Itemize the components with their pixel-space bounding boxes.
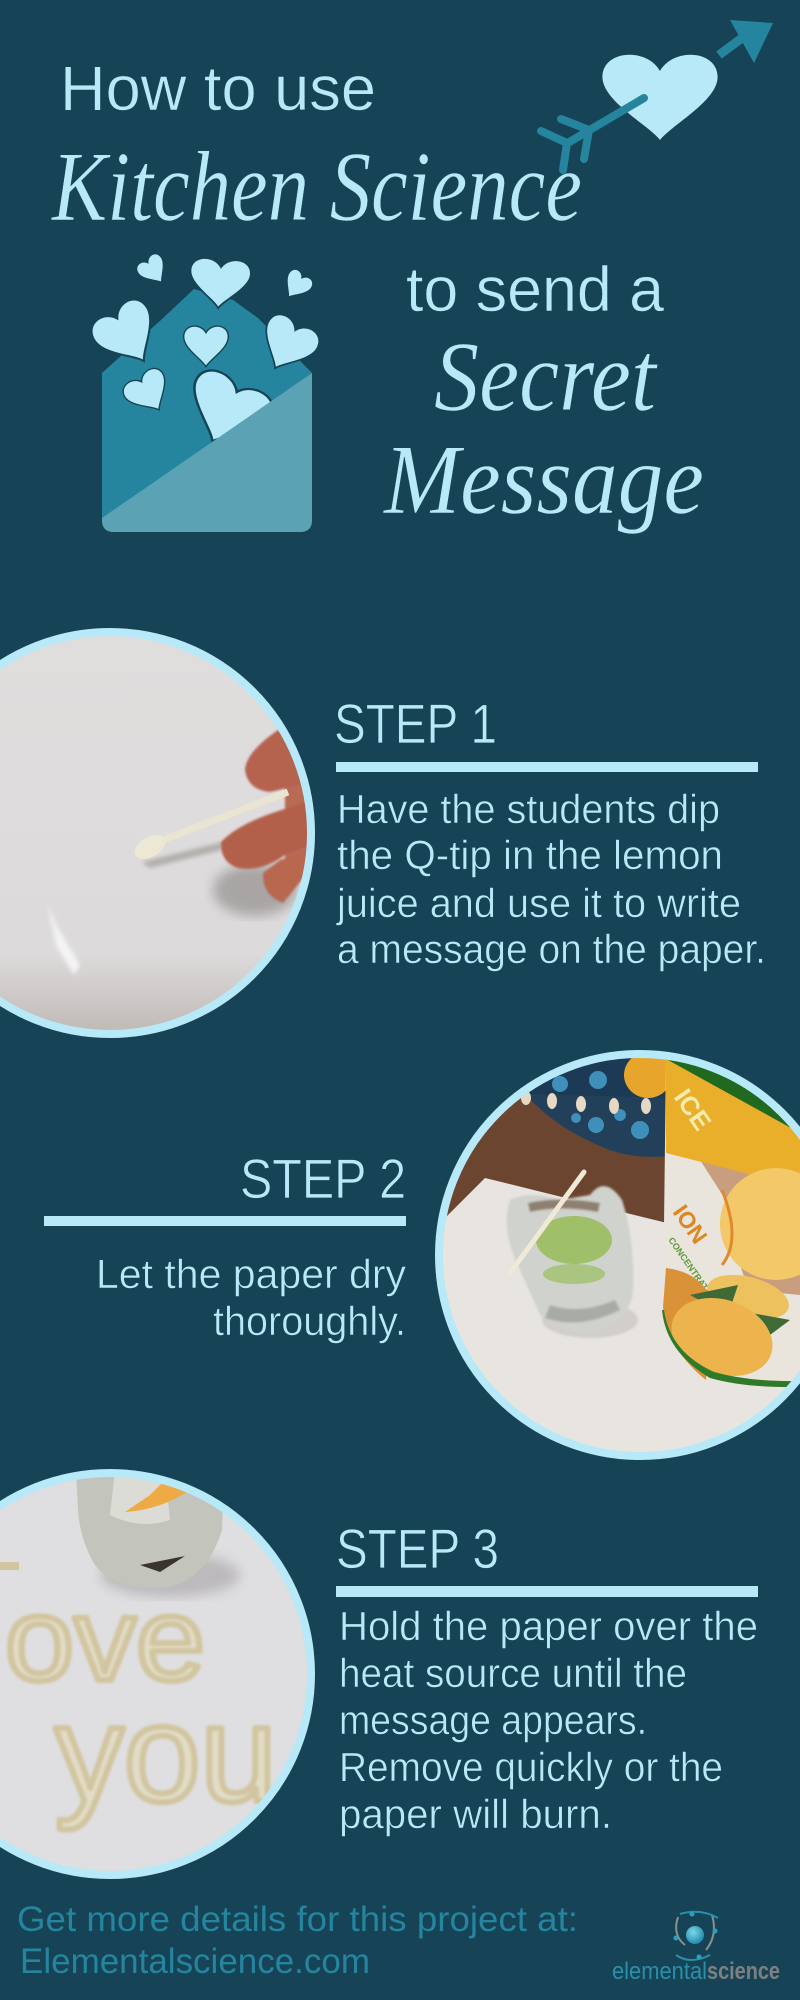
lemon bbox=[624, 1058, 666, 1098]
photo: step 1 bbox=[0, 630, 315, 1035]
footer call to action: Elementalscience.com bbox=[20, 1942, 370, 1981]
step 3 rule bbox=[336, 1586, 758, 1597]
revealed message bbox=[6, 1612, 272, 1834]
step 1 text: juice and use it to write bbox=[336, 880, 741, 926]
logo wordmark bbox=[612, 1958, 780, 1985]
heading: to send a: to send a bbox=[406, 255, 665, 325]
atom icon bbox=[674, 1912, 718, 1960]
photo: step 3 bbox=[0, 1470, 311, 1880]
icon: envelope with hearts bbox=[87, 252, 323, 532]
step 2 text: thoroughly. bbox=[213, 1298, 406, 1344]
step 3 text: paper will burn. bbox=[339, 1791, 612, 1837]
step 2 heading: STEP 2 bbox=[240, 1147, 406, 1210]
logo wordmark: science bbox=[707, 1958, 780, 1985]
bowl of marbles bbox=[529, 1092, 666, 1157]
step 1 text bbox=[336, 786, 766, 972]
logo: elemental science bbox=[612, 1912, 780, 1985]
heading: Secret: Secret bbox=[434, 321, 658, 432]
photo: step 2: CONCENTRATE bbox=[666, 1235, 714, 1297]
step 2 text: Let the paper dry bbox=[96, 1251, 406, 1297]
glass holder bbox=[507, 1186, 638, 1338]
step 1 text: Have the students dip bbox=[337, 786, 720, 832]
step 3 text: Remove quickly or the bbox=[339, 1744, 723, 1790]
lemon slices bbox=[720, 1168, 800, 1280]
q-tip bbox=[155, 792, 288, 843]
step 1 rule bbox=[336, 762, 758, 772]
glass bbox=[76, 1470, 224, 1588]
footer call to action: Get more details for this project at: bbox=[17, 1900, 578, 1939]
step 2 rule bbox=[44, 1216, 406, 1226]
step 1 text: the Q-tip in the lemon bbox=[337, 832, 723, 878]
icon: heart with arrow bbox=[541, 20, 773, 170]
step 3 heading: STEP 3 bbox=[336, 1517, 499, 1580]
step 3 text bbox=[339, 1603, 758, 1837]
envelope front panel bbox=[102, 373, 312, 532]
step 3 text: message appears. bbox=[339, 1697, 647, 1743]
logo wordmark: elemental bbox=[612, 1958, 707, 1985]
footer call to action bbox=[17, 1900, 578, 1981]
revealed message: you bbox=[55, 1677, 277, 1831]
step 2 text bbox=[96, 1251, 406, 1344]
heading: Message: Message bbox=[382, 424, 704, 535]
floating hearts bbox=[87, 252, 323, 457]
photo: step 2 bbox=[430, 1050, 800, 1470]
heading: Kitchen Science: Kitchen Science bbox=[50, 131, 582, 242]
q-tip bbox=[510, 1172, 584, 1273]
step 1 text: a message on the paper. bbox=[337, 926, 766, 972]
revealed message: ove bbox=[5, 1574, 205, 1706]
step 3 text: Hold the paper over the bbox=[339, 1603, 758, 1649]
step 3 text: heat source until the bbox=[339, 1650, 687, 1696]
paper bbox=[443, 1178, 786, 1452]
heading: How to use: How to use bbox=[60, 54, 376, 124]
photo: step 2: ION bbox=[668, 1200, 713, 1248]
envelope back bbox=[102, 289, 312, 532]
glass shadow bbox=[100, 1553, 240, 1597]
bottle label text: ICE bbox=[668, 1083, 718, 1136]
bottle bbox=[664, 1062, 725, 1231]
step 1 heading: STEP 1 bbox=[334, 692, 497, 755]
